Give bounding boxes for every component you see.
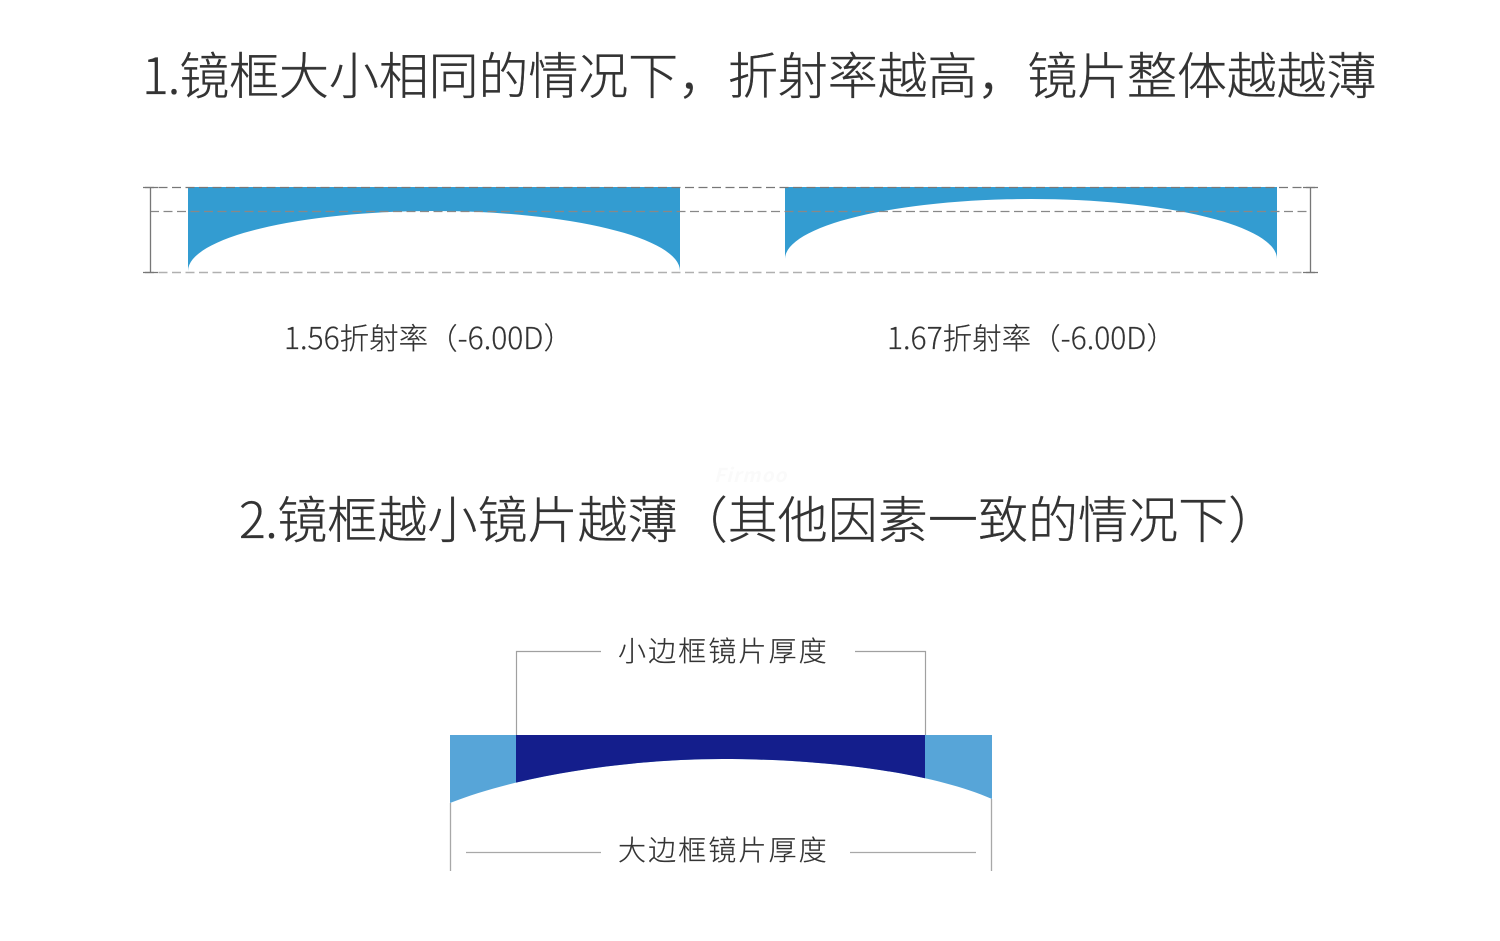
- frame size lens diagram: [450, 650, 992, 871]
- label: 1.67 index: 1.67折射率（-6.00D）: [887, 314, 1176, 358]
- watermark: Firmoo: [714, 461, 787, 488]
- lens: small frame section: [516, 735, 925, 783]
- bracket: small frame: [516, 652, 926, 735]
- lens: 1.56 index cross section: [188, 187, 680, 271]
- label: small frame thickness: 小边框镜片厚度: [618, 630, 829, 670]
- lens: 1.67 index cross section: [785, 187, 1277, 259]
- title: frame size heading: 2.镜框越小镜片越薄（其他因素一致的情况下）: [239, 481, 1278, 553]
- label: large frame thickness: 大边框镜片厚度: [618, 829, 829, 869]
- title: refractive index heading: 1.镜框大小相同的情况下，折射率越高，镜片整体越越薄: [142, 37, 1376, 109]
- lens: large frame: [450, 735, 992, 803]
- thickness guides: [143, 187, 1318, 273]
- label: 1.56 index: 1.56折射率（-6.00D）: [284, 314, 573, 358]
- bracket: large frame: [450, 799, 992, 871]
